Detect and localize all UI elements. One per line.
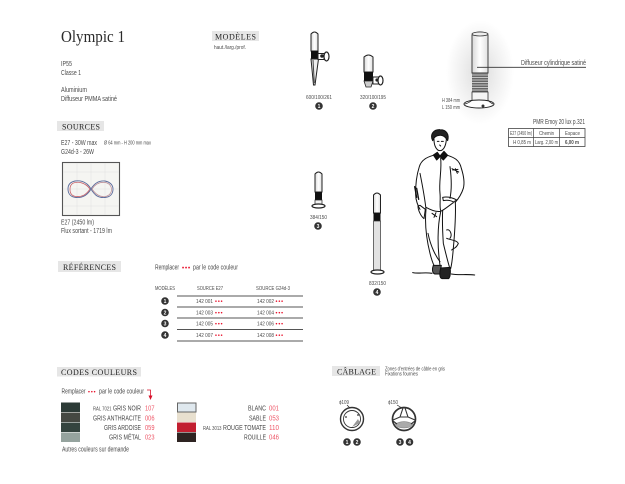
table: references: ••• xyxy=(276,310,284,316)
heading: références xyxy=(58,261,121,272)
table: references: MODÈLES xyxy=(155,285,175,292)
table: references: 142 001 xyxy=(196,299,213,305)
label: model 2 xyxy=(360,95,386,110)
note: other colours: Autres couleurs sur demande xyxy=(62,446,129,454)
heading: sources: SOURCES xyxy=(62,122,100,132)
callout: cylindrical diffuser: Diffuseur cylindrique satiné xyxy=(521,60,586,67)
text block: product specifications: Diffuseur PMMA satiné xyxy=(61,96,117,103)
table: references: ••• xyxy=(276,333,284,339)
label: model 1 xyxy=(306,95,332,110)
arrow: to colour code xyxy=(147,390,152,400)
labels: light colours: 110 xyxy=(269,425,279,432)
text block: sources: G24d-3 - 26W xyxy=(61,149,94,156)
labels: light colours: 001 xyxy=(269,406,279,412)
label: models 1 and 2: 1 xyxy=(346,440,349,446)
text block: product specifications: IP55 xyxy=(61,61,72,68)
note: cable entry: Fixations fournies xyxy=(385,372,418,378)
table: references: SOURCE G24d-3 xyxy=(256,286,290,292)
caption: light flux xyxy=(61,220,112,235)
label: models 3 and 4 xyxy=(396,438,413,446)
note: cable entry xyxy=(385,366,445,378)
callout: cylindrical diffuser xyxy=(477,60,586,67)
diagram: base 109 mm: ϕ109 xyxy=(339,400,349,406)
note: replace colour code xyxy=(62,388,144,396)
label: model 3: 384/150 xyxy=(310,215,327,221)
lamp model 3 xyxy=(312,172,325,208)
label: model 2: 2 xyxy=(372,104,375,110)
label: model 2: 320/100/195 xyxy=(360,95,386,101)
diagram: base 150 mm xyxy=(388,400,416,430)
title: Olympic 1 xyxy=(61,27,125,46)
table: references: 142 008 xyxy=(257,333,274,339)
table: PMR values: E27 (2450 lm) xyxy=(510,131,532,137)
lamp model 2 xyxy=(364,55,383,87)
illustration: sketched standing man xyxy=(413,130,475,279)
labels: dark colours: 107 xyxy=(145,406,155,412)
label: models 3 and 4: 4 xyxy=(408,440,411,446)
note: replace colour code: ••• xyxy=(182,266,191,272)
labels: dark colours: GRIS ARDOISE xyxy=(104,425,141,432)
label: model 1: 1 xyxy=(318,104,321,110)
table: references: 2 xyxy=(164,310,167,316)
labels: light colours: 046 xyxy=(269,434,279,442)
label: model 4 xyxy=(369,281,386,296)
labels: dark colours: 059 xyxy=(145,425,155,432)
table: references: 142 006 xyxy=(257,322,274,328)
table: references: 142 003 xyxy=(196,310,213,316)
text block: product specifications: Classe 1 xyxy=(61,70,81,77)
caption: dimensions: haut./larg./prof. xyxy=(214,45,246,51)
table: references: 142 002 xyxy=(257,299,274,305)
swatches: light colours xyxy=(177,403,196,442)
table: references: ••• xyxy=(276,322,284,328)
labels: light colours: RAL 3013 xyxy=(203,426,222,432)
table: references: ••• xyxy=(215,322,223,328)
lamp model 1 xyxy=(311,32,329,85)
label: lamp dimensions xyxy=(442,98,460,111)
table: references xyxy=(155,285,303,341)
label: models 3 and 4: 3 xyxy=(399,440,402,446)
note: replace colour code: par le code couleur xyxy=(99,388,144,396)
heading: câblage xyxy=(332,366,380,376)
text block: product specifications: Aluminium xyxy=(61,87,87,94)
table: references: ••• xyxy=(215,310,223,316)
labels: light colours xyxy=(203,406,279,442)
table: references: 142 007 xyxy=(196,333,213,339)
text block: product specifications xyxy=(61,61,117,103)
labels: dark colours: RAL 7021 xyxy=(93,406,112,412)
labels: dark colours xyxy=(93,406,155,442)
caption: light flux: E27 (2450 lm) xyxy=(61,220,94,226)
labels: dark colours: 006 xyxy=(145,416,155,422)
note: replace colour code xyxy=(155,264,238,272)
table: PMR values: Chemin xyxy=(539,131,554,137)
heading: sources xyxy=(57,121,104,132)
labels: dark colours: 023 xyxy=(145,434,155,442)
note: cable entry: Zones d'entrées de câble en gris xyxy=(385,366,445,372)
heading: codes couleurs: CODES COULEURS xyxy=(61,368,137,377)
heading: câblage: CÂBLAGE xyxy=(337,366,376,376)
label: model 4: 832/150 xyxy=(369,281,386,287)
labels: light colours: BLANC xyxy=(248,406,266,412)
swatches: dark colours xyxy=(61,402,80,442)
table: PMR values: Espace xyxy=(565,131,580,137)
lamp model 4 xyxy=(371,193,384,274)
table: references: 3 xyxy=(164,322,167,328)
diagram: base 150 mm: ϕ150 xyxy=(388,400,398,406)
heading: références: RÉFÉRENCES xyxy=(63,262,116,272)
table: PMR values xyxy=(508,128,585,146)
label: models 1 and 2: 2 xyxy=(356,440,359,446)
text block: sources xyxy=(61,140,151,156)
label: model 4: 4 xyxy=(376,290,379,296)
table: references: ••• xyxy=(215,333,223,339)
chart: polar light distribution xyxy=(62,162,120,216)
heading: PMR: PMR Emoy 20 lux p.321 xyxy=(533,119,585,126)
label: models 1 and 2 xyxy=(343,438,361,446)
labels: light colours: ROUILLE xyxy=(244,434,266,442)
caption: light flux: Flux sortant - 1719 lm xyxy=(61,228,112,235)
labels: light colours: 053 xyxy=(269,416,279,422)
labels: dark colours: GRIS NOIR xyxy=(113,406,141,412)
label: model 3 xyxy=(310,215,327,230)
text block: sources: Ø 64 mm - H 200 mm max xyxy=(104,140,151,146)
labels: light colours: ROUGE TOMATE xyxy=(223,425,266,432)
label: lamp dimensions: H 384 mm xyxy=(442,98,460,104)
diagram: base 109 mm xyxy=(339,400,364,430)
label: model 1: 600/100/261 xyxy=(306,95,332,101)
labels: dark colours: GRIS MÉTAL xyxy=(109,432,141,442)
note: replace colour code: ••• xyxy=(88,390,96,396)
table: references: 4 xyxy=(164,333,167,339)
table: references: 1 xyxy=(164,299,167,305)
table: PMR values: 6,00 m xyxy=(565,140,579,146)
label: lamp dimensions: L 150 mm xyxy=(442,105,460,111)
heading: modèles: MODÈLES xyxy=(215,32,256,42)
table: PMR values: Larg. 2,00 m xyxy=(535,140,558,146)
labels: light colours: SABLE xyxy=(249,416,266,422)
table: references: ••• xyxy=(215,299,223,305)
table: references: 142 004 xyxy=(257,310,274,316)
text block: sources: E27 - 30W max xyxy=(61,140,97,147)
lamp photo: cylindrical diffuser xyxy=(446,20,514,124)
table: references: SOURCE E27 xyxy=(197,286,223,292)
note: replace colour code: par le code couleur xyxy=(193,264,238,272)
table: PMR values: H 0,85 m xyxy=(513,140,531,146)
table: references: 142 005 xyxy=(196,322,213,328)
note: replace colour code: Remplacer xyxy=(155,264,179,272)
table: references: ••• xyxy=(276,299,284,305)
label: model 3: 3 xyxy=(317,224,320,230)
note: replace colour code: Remplacer xyxy=(62,388,86,396)
labels: dark colours: GRIS ANTHRACITE xyxy=(93,416,141,422)
